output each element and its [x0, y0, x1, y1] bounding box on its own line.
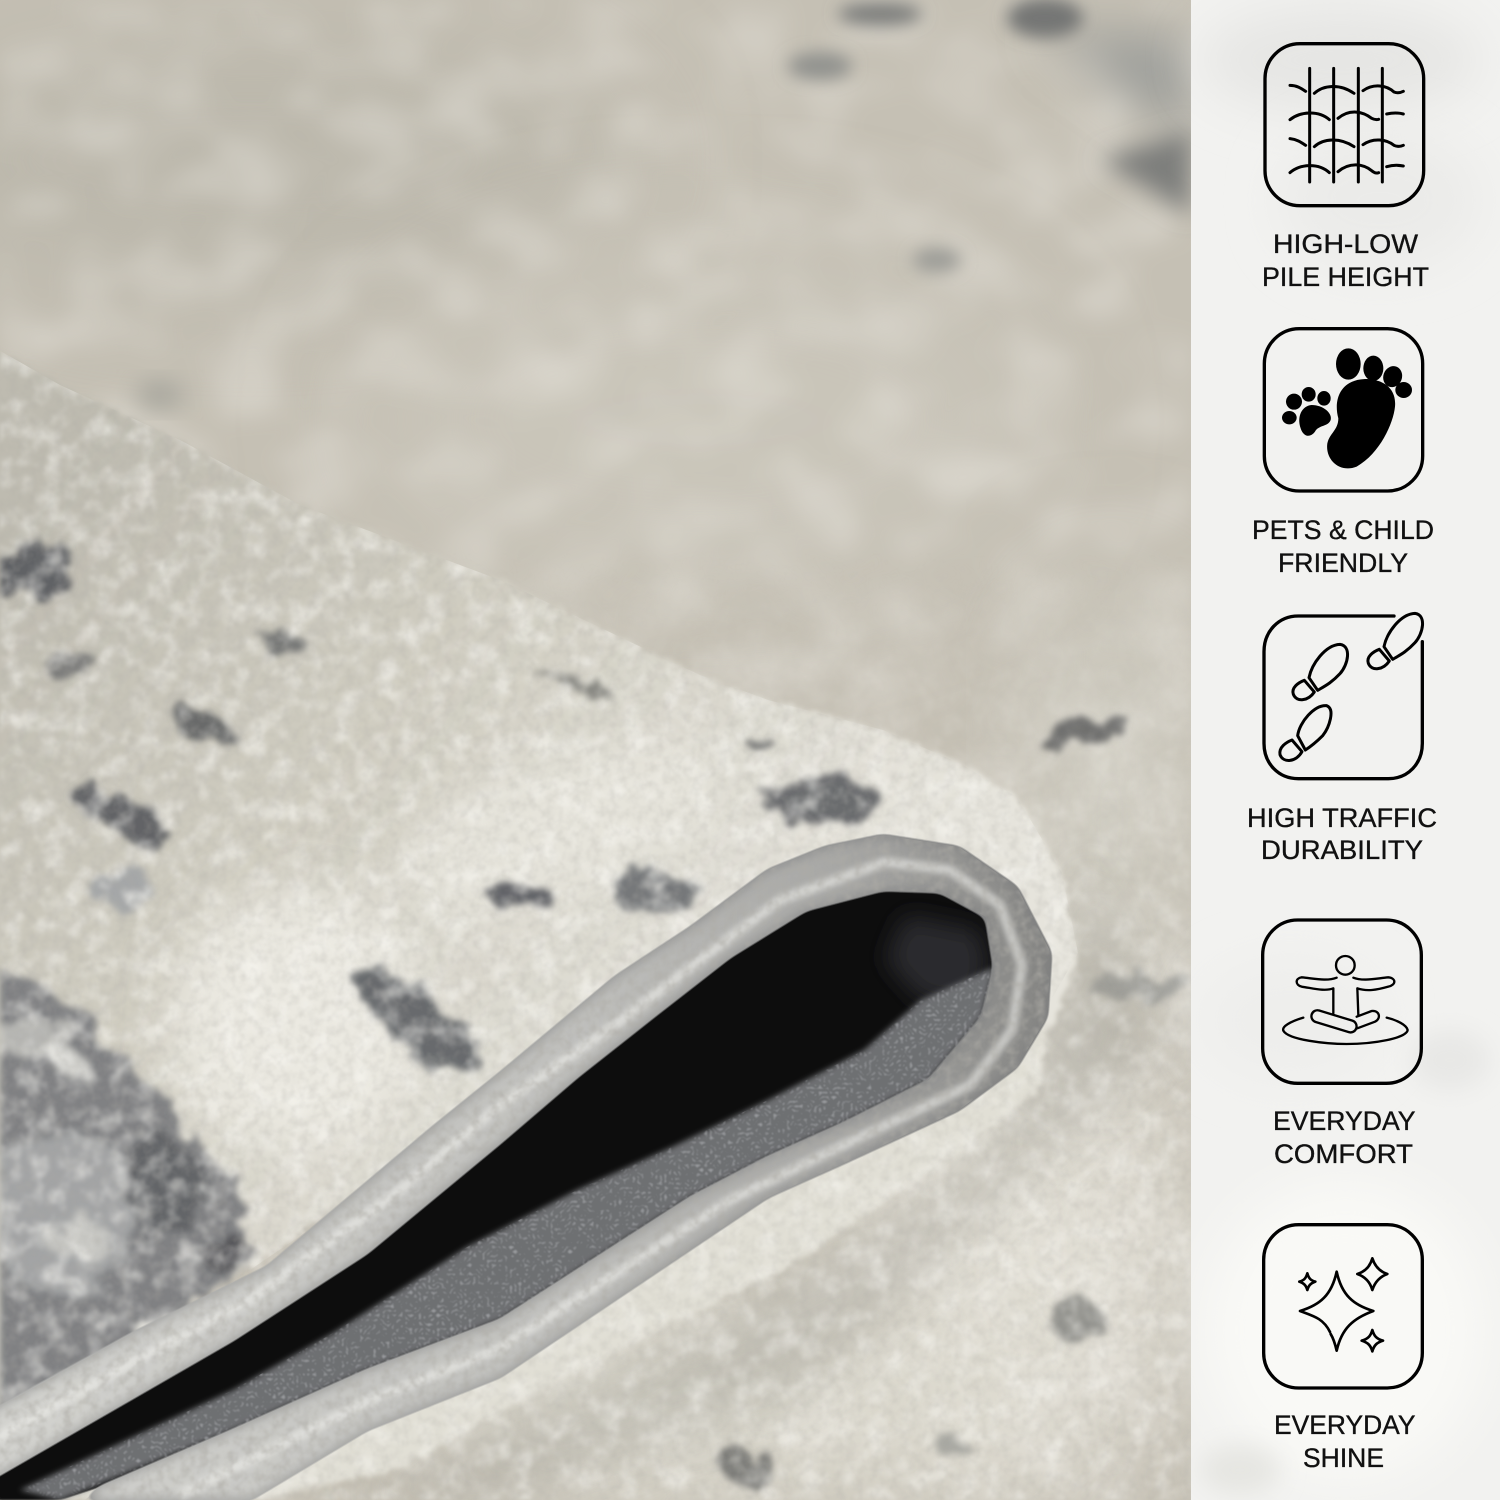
label: high traffic durability: HIGH TRAFFIC: [1247, 803, 1437, 833]
feature: high traffic durability: [1247, 613, 1444, 865]
label: pets and child friendly: FRIENDLY: [1278, 548, 1408, 578]
feature: everyday shine: [1264, 1225, 1422, 1473]
feature: high-low pile height: [1262, 44, 1429, 292]
icon: seated person: [1263, 920, 1421, 1083]
side panel background: [1191, 0, 1500, 1500]
photo: rug backing cavity: [0, 890, 1000, 1500]
feature: pets and child friendly: [1252, 329, 1441, 578]
feature: everyday comfort: [1263, 920, 1422, 1169]
label: everyday comfort: COMFORT: [1274, 1139, 1413, 1169]
label: high-low pile height: HIGH-LOW: [1273, 229, 1418, 259]
icon: paw and foot: [1264, 329, 1423, 491]
background: blurred rug floor: [0, 0, 1191, 1500]
photo: shadow under rug fold: [360, 850, 1160, 1500]
photo: bound rug edge: [0, 820, 1060, 1500]
icon: pile weave: [1265, 44, 1424, 206]
label: everyday comfort: EVERYDAY: [1273, 1106, 1416, 1136]
icon: sparkles: [1264, 1225, 1422, 1388]
photo: lower rug layer: [0, 1000, 1050, 1500]
photo: folded rug pile surface: [0, 340, 1090, 1450]
icon: footprints: [1264, 613, 1423, 779]
photo: focused floor texture: [252, 718, 1191, 1500]
label: everyday shine: SHINE: [1303, 1443, 1384, 1473]
label: pets and child friendly: PETS & CHILD: [1252, 515, 1434, 545]
label: high-low pile height: PILE HEIGHT: [1262, 262, 1429, 292]
label: high traffic durability: DURABILITY: [1261, 835, 1423, 865]
label: everyday shine: EVERYDAY: [1274, 1410, 1416, 1440]
